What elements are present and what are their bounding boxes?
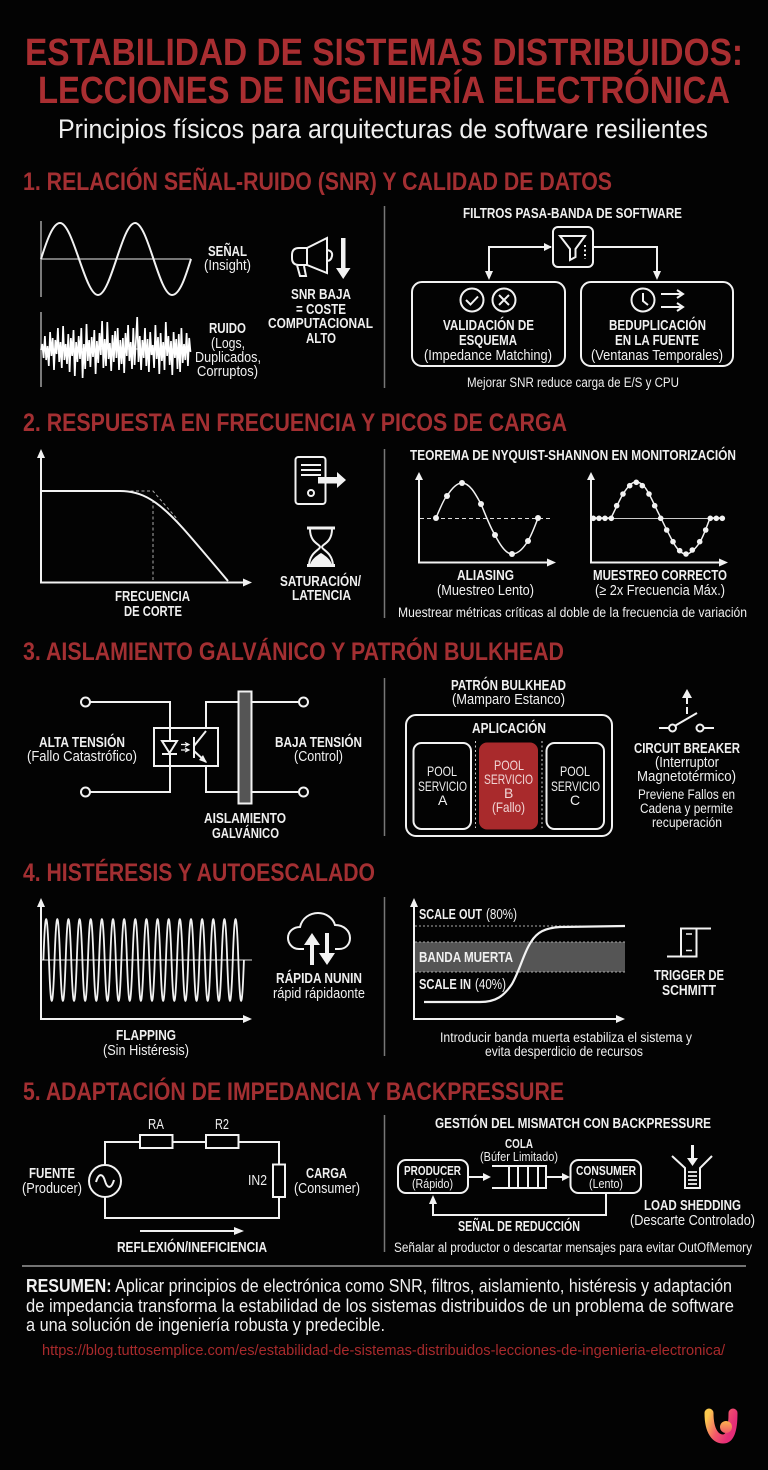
box: consumer	[570, 1160, 641, 1193]
icon: clock	[632, 288, 654, 312]
label: circuit breaker: Magnetotérmico)	[637, 769, 736, 785]
label: correct sampling: (≥ 2x Frecuencia Máx.)	[595, 583, 725, 599]
diagram: circuit: R2	[215, 1117, 229, 1133]
box: consumer: (Lento)	[589, 1177, 623, 1191]
icon: double arrows	[661, 290, 683, 311]
heading: backpressure: GESTIÓN DEL MISMATCH CON BACKPRESSURE	[435, 1114, 711, 1132]
panel: schema validation: VALIDACIÓN DE	[443, 316, 534, 334]
label: low voltage	[275, 733, 362, 765]
label: flapping: (Sin Histéresis)	[103, 1043, 189, 1059]
panel: application	[406, 715, 612, 836]
label: Schmitt trigger: SCHMITT	[662, 983, 716, 999]
label: low SNR: = COSTE	[296, 302, 346, 318]
label: low voltage: (Control)	[294, 749, 343, 765]
panel: deduplication: (Ventanas Temporales)	[591, 348, 723, 364]
label: low SNR: SNR BAJA	[291, 287, 351, 303]
panel: application: APLICACIÓN	[472, 719, 546, 737]
panel: schema validation: (Impedance Matching)	[424, 348, 552, 364]
label: circuit breaker: recuperación	[652, 815, 722, 830]
heading: bulkhead	[451, 676, 566, 708]
label: galvanic isolation	[204, 811, 286, 842]
label: galvanic isolation: GALVÁNICO	[212, 825, 279, 842]
chart: correct sampling	[587, 472, 728, 566]
label: aliasing	[437, 568, 534, 599]
icon: cloud scaling	[288, 913, 350, 965]
label: Schmitt trigger: TRIGGER DE	[654, 968, 724, 984]
label: saturation: SATURACIÓN/	[280, 572, 361, 590]
label: dead band: BANDA MUERTA	[419, 950, 513, 966]
label: circuit breaker: CIRCUIT BREAKER	[634, 741, 740, 757]
label: correct sampling	[593, 568, 727, 599]
label: source: (Producer)	[22, 1181, 82, 1197]
icon: megaphone	[292, 238, 332, 276]
label: high voltage	[27, 733, 137, 765]
panel: section 4 hysteresis	[23, 858, 724, 1059]
label: load: (Consumer)	[294, 1181, 360, 1197]
panel: section 3 isolation	[23, 636, 740, 842]
label: high voltage: ALTA TENSIÓN	[39, 733, 125, 751]
pool C: C	[570, 792, 580, 808]
label: circuit breaker: (Interruptor	[655, 755, 719, 771]
panel: deduplication	[581, 282, 733, 366]
label: rapid scaling: RÁPIDA NUNIN	[276, 970, 362, 987]
label: flapping	[103, 1028, 189, 1059]
arrow: filter to deduplication	[593, 247, 661, 280]
heading: bulkhead: PATRÓN BULKHEAD	[451, 676, 566, 694]
box: producer: (Rápido)	[412, 1177, 453, 1191]
pool C: SERVICIO	[551, 778, 600, 794]
icon: filter box	[553, 227, 593, 267]
caption: section 1: Mejorar SNR reduce carga de E/S y CPU	[467, 375, 679, 390]
label: circuit breaker	[634, 741, 740, 830]
arrow: producer to queue	[468, 1173, 491, 1181]
pool B failed: SERVICIO	[484, 771, 533, 787]
chart: noise wave	[41, 312, 190, 387]
pool B failed: B	[504, 785, 513, 801]
label: source: FUENTE	[29, 1166, 75, 1182]
diagram: circuit	[89, 1117, 285, 1218]
icon: Schmitt trigger	[667, 928, 711, 956]
label: scale in: SCALE IN	[419, 977, 471, 993]
label: noise: (Logs,	[211, 336, 245, 352]
label: signal: SEÑAL	[208, 242, 247, 260]
label: reduction signal: SEÑAL DE REDUCCIÓN	[458, 1217, 580, 1235]
pool A: SERVICIO	[418, 778, 467, 794]
label: queue: COLA	[505, 1136, 533, 1151]
label: noise: Duplicados,	[195, 350, 261, 366]
arrow: reflection	[140, 1227, 244, 1235]
pool A: A	[438, 792, 448, 808]
box: producer	[398, 1160, 468, 1193]
label: scale out: (80%)	[486, 907, 517, 923]
caption: section 4: Introducir banda muerta estabiliza el sistema y	[440, 1030, 692, 1045]
panel: section 1 SNR	[23, 166, 733, 390]
arrow: queue to consumer	[546, 1173, 570, 1181]
heading: section 5: 5. ADAPTACIÓN DE IMPEDANCIA Y BACKPRESSURE	[23, 1076, 564, 1106]
chart: low-pass response	[37, 449, 252, 586]
chart: signal wave	[41, 221, 191, 297]
chart: aliasing	[415, 472, 556, 566]
label: reflection: REFLEXIÓN/INEFICIENCIA	[117, 1238, 267, 1256]
label: circuit breaker: Cadena y permite	[640, 801, 733, 816]
diagram: optocoupler	[81, 692, 308, 804]
heading: bulkhead: (Mamparo Estanco)	[452, 692, 565, 708]
label: signal	[204, 242, 251, 274]
icon: hourglass	[307, 528, 335, 566]
panel: deduplication: BEDUPLICACIÓN	[609, 316, 706, 334]
label: Schmitt trigger	[654, 968, 724, 999]
label: noise: RUIDO	[209, 321, 246, 337]
label: load shedding: LOAD SHEDDING	[644, 1198, 741, 1214]
caption: section 4	[440, 1030, 692, 1059]
label: rapid scaling	[273, 970, 365, 1002]
label: noise: Corruptos)	[197, 364, 258, 380]
label: cutoff frequency: DE CORTE	[124, 604, 182, 620]
label: flapping: FLAPPING	[116, 1028, 176, 1044]
title	[25, 32, 743, 112]
box: producer: PRODUCER	[404, 1163, 461, 1178]
icon: server with arrow	[296, 457, 346, 504]
pool A: POOL	[427, 763, 457, 779]
label: circuit breaker: Previene Fallos en	[638, 787, 735, 802]
icon: load shedding	[672, 1145, 712, 1188]
label: low voltage: BAJA TENSIÓN	[275, 733, 362, 751]
text block: summary: a una solución de ingeniería robusta y predecible.	[26, 1315, 385, 1335]
label: scale in: (40%)	[475, 977, 506, 993]
icon: down arrow	[336, 238, 350, 279]
label: queue	[480, 1136, 558, 1164]
label: signal: (Insight)	[204, 258, 251, 274]
pool B failed: POOL	[494, 757, 524, 773]
diagram: circuit: RA	[148, 1117, 164, 1133]
chart: dead band	[410, 898, 625, 1023]
label: low SNR	[268, 287, 373, 347]
icon: logo	[709, 1413, 733, 1439]
label: correct sampling: MUESTREO CORRECTO	[593, 568, 727, 584]
pool C	[546, 743, 604, 829]
diagram: circuit: IN2	[248, 1173, 267, 1189]
label: cutoff frequency	[115, 589, 190, 620]
box: consumer: CONSUMER	[576, 1163, 636, 1178]
heading: section 1: 1. RELACIÓN SEÑAL-RUIDO (SNR) Y CALIDAD DE DATOS	[23, 166, 612, 196]
heading: section 2: 2. RESPUESTA EN FRECUENCIA Y PICOS DE CARGA	[23, 409, 567, 437]
panel: schema validation	[412, 282, 565, 366]
label: high voltage: (Fallo Catastrófico)	[27, 749, 137, 765]
panel: section 2 frequency response	[23, 409, 747, 620]
label: load	[294, 1166, 360, 1197]
label: load shedding	[630, 1198, 755, 1229]
label: source	[22, 1166, 82, 1197]
label: scale out: SCALE OUT	[419, 907, 482, 923]
panel: schema validation: ESQUEMA	[459, 333, 517, 349]
icon: circuit breaker	[659, 689, 714, 732]
source url: https://blog.tuttosemplice.com/es/estabilidad-de-sistemas-distribuidos-lecciones-de-ingenieria-electronica/	[42, 1342, 726, 1359]
label: saturation: LATENCIA	[292, 588, 351, 604]
panel: deduplication: EN LA FUENTE	[615, 333, 699, 349]
chart: flapping	[37, 898, 252, 1023]
panel: section 5 impedance	[22, 1076, 755, 1256]
heading: section 4: 4. HISTÉRESIS Y AUTOESCALADO	[23, 858, 375, 887]
subtitle: Principios físicos para arquitecturas de software resilientes	[58, 114, 708, 144]
pool B failed	[479, 742, 538, 830]
label: cutoff frequency: FRECUENCIA	[115, 589, 190, 605]
heading: band-pass filters: FILTROS PASA-BANDA DE SOFTWARE	[463, 206, 682, 222]
pool A	[414, 743, 471, 829]
caption: section 4: evita desperdicio de recursos	[485, 1044, 643, 1059]
pool B failed: (Fallo)	[492, 799, 525, 815]
arrow: reduction signal	[429, 1193, 606, 1215]
label: aliasing: (Muestreo Lento)	[437, 583, 534, 599]
label: load: CARGA	[306, 1166, 347, 1182]
label: saturation	[280, 572, 361, 604]
label: noise	[195, 321, 261, 380]
label: low SNR: COMPUTACIONAL	[268, 316, 373, 332]
text block: summary	[26, 1276, 734, 1335]
label: aliasing: ALIASING	[457, 568, 514, 584]
icon: queue	[492, 1166, 546, 1188]
label: queue: (Búfer Limitado)	[480, 1150, 558, 1164]
label: low SNR: ALTO	[306, 331, 336, 347]
icon: cross	[492, 288, 516, 312]
arrow: filter to validation	[485, 243, 552, 280]
pool C: POOL	[560, 763, 590, 779]
label: rapid scaling: rápid rápidaonte	[273, 986, 365, 1002]
icon: check	[460, 288, 484, 312]
label: galvanic isolation: AISLAMIENTO	[204, 811, 286, 827]
heading: section 3: 3. AISLAMIENTO GALVÁNICO Y PATRÓN BULKHEAD	[23, 636, 564, 666]
